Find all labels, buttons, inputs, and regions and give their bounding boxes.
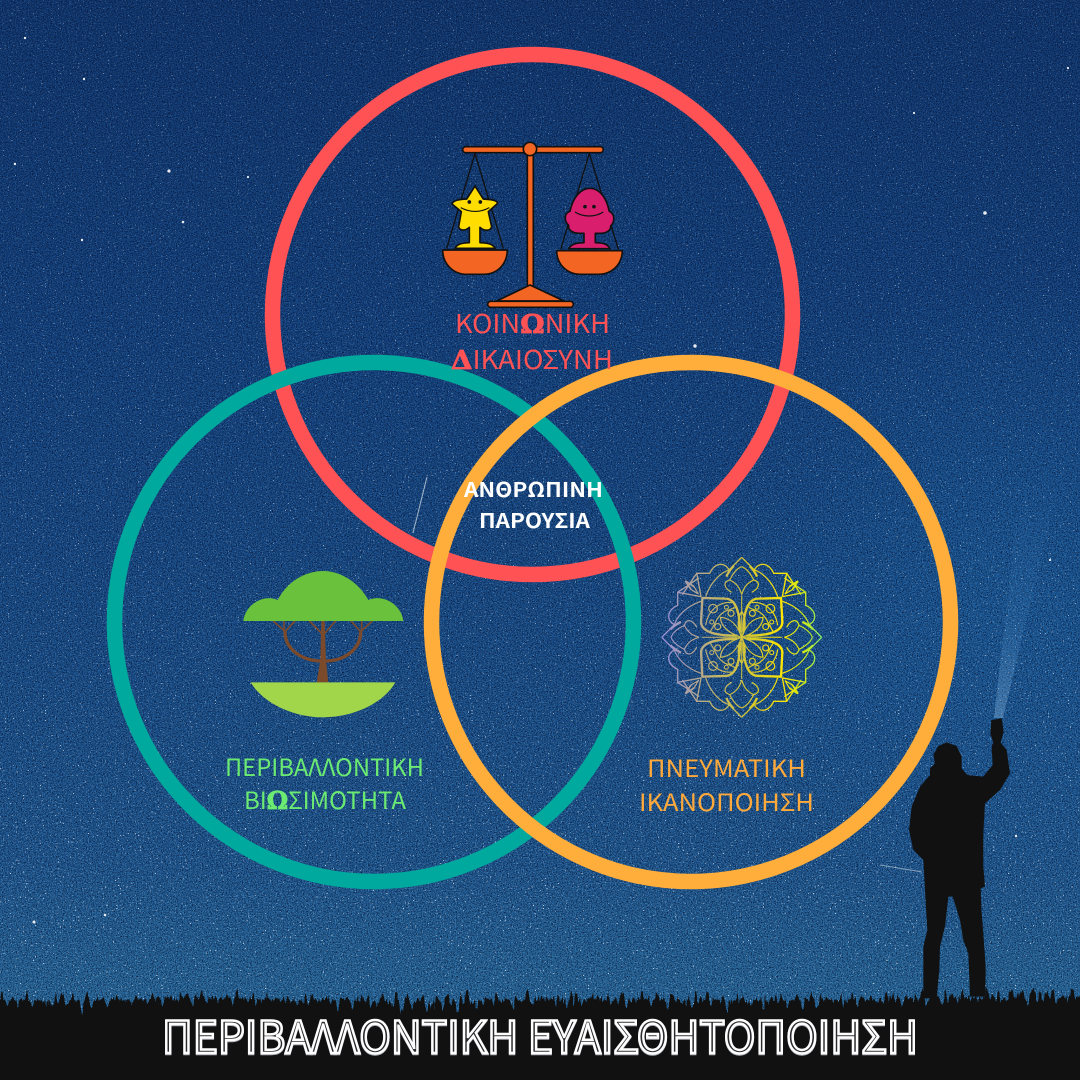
icon: balance scale with two characters — [443, 142, 622, 307]
label: environmental sustainability — [225, 748, 424, 816]
label: social justice — [451, 304, 613, 377]
label: social justice: ΔΙΚΑΙΟΣΥΝΗ — [451, 340, 613, 377]
silhouette: person holding flashlight — [909, 718, 1010, 998]
label: spiritual fulfilment: ΠΝΕΥΜΑΤΙΚΗ — [647, 749, 806, 784]
label: environmental sustainability: ΒΙΩΣΙΜΟΤΗΤΑ — [244, 781, 406, 816]
label: human presence — [463, 474, 603, 534]
label: spiritual fulfilment — [639, 749, 814, 818]
label: spiritual fulfilment: ΙΚΑΝΟΠΟΙΗΣΗ — [639, 783, 814, 818]
flashlight beam — [994, 470, 1062, 718]
title: ΠΕΡΙΒΑΛΛΟΝΤΙΚΗ ΕΥΑΙΣΘΗΤΟΠΟΙΗΣΗ — [162, 1002, 918, 1066]
icon: mandala — [661, 556, 822, 718]
label: environmental sustainability: ΠΕΡΙΒΑΛΛΟΝΤΙΚΗ — [225, 748, 424, 783]
circle: social justice — [272, 54, 792, 574]
icon: tree — [243, 571, 403, 717]
circle: spiritual fulfilment — [432, 362, 950, 882]
label: human presence: ΑΝΘΡΩΠΙΝΗ — [463, 474, 603, 503]
grass and ground band — [0, 996, 1080, 1080]
circle: environmental sustainability — [114, 362, 634, 882]
label: social justice: ΚΟΙΝΩΝΙΚΗ — [455, 304, 610, 341]
label: human presence: ΠΑΡΟΥΣΙΑ — [479, 505, 590, 534]
